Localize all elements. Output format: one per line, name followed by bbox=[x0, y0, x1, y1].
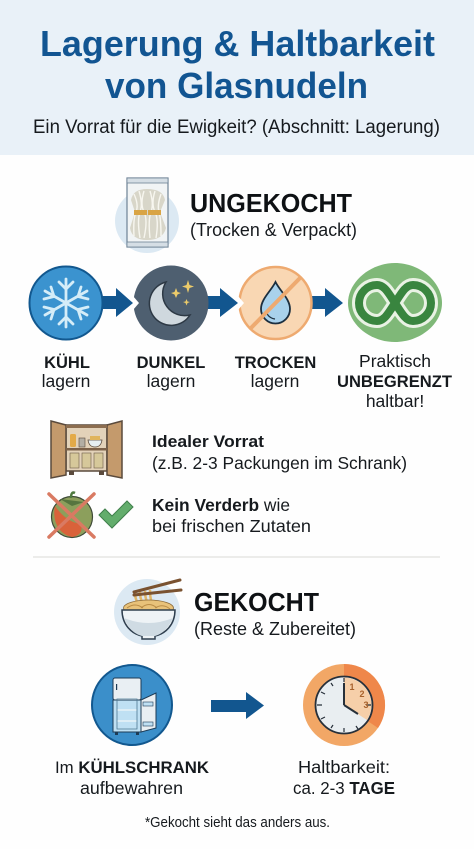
label: trocken lagern: TROCKEN bbox=[235, 354, 316, 372]
icon: noodle package bbox=[115, 178, 179, 253]
text: kein verderb: Kein Verderb wie bbox=[152, 495, 290, 515]
icon: check mark bbox=[99, 501, 133, 528]
label: praktisch unbegrenzt haltbar: haltbar! bbox=[366, 391, 424, 411]
label: dunkel lagern: lagern bbox=[147, 371, 195, 391]
icon: moon bbox=[133, 266, 208, 340]
arrow: trocken to haltbar bbox=[312, 288, 343, 317]
text: idealer vorrat bbox=[152, 432, 407, 473]
title bbox=[40, 23, 435, 106]
label: haltbarkeit 2-3 tage: Haltbarkeit: bbox=[298, 757, 390, 777]
icon: clock bbox=[303, 664, 385, 746]
arrow: fridge to shelf life bbox=[211, 692, 264, 719]
icon: clock: 1 bbox=[349, 682, 355, 692]
label: dunkel lagern: DUNKEL bbox=[137, 354, 205, 372]
label: trocken lagern: lagern bbox=[251, 371, 299, 391]
subheading: trocken und verpackt: (Trocken & Verpackt) bbox=[190, 219, 357, 240]
label: kuehl lagern: lagern bbox=[42, 371, 90, 391]
header panel bbox=[0, 0, 474, 155]
label: dunkel lagern bbox=[137, 354, 205, 391]
icon: open fridge bbox=[92, 665, 172, 745]
icon: water drop crossed out bbox=[238, 267, 312, 339]
label: im kuehlschrank aufbewahren: aufbewahren bbox=[80, 778, 183, 798]
arrow: dunkel to trocken bbox=[207, 288, 238, 317]
icon: infinity bbox=[348, 263, 442, 342]
label: praktisch unbegrenzt haltbar: UNBEGRENZT bbox=[337, 373, 452, 391]
label: haltbarkeit 2-3 tage bbox=[293, 757, 395, 798]
label: praktisch unbegrenzt haltbar bbox=[337, 351, 452, 411]
label: haltbarkeit 2-3 tage: ca. 2-3 TAGE bbox=[293, 778, 395, 798]
heading: gekocht: GEKOCHT bbox=[194, 587, 319, 617]
icon: spoiled tomato crossed out bbox=[49, 493, 94, 538]
label: im kuehlschrank aufbewahren bbox=[55, 758, 210, 798]
text: kein verderb bbox=[152, 495, 311, 536]
label: im kuehlschrank aufbewahren: Im KÜHLSCHRANK bbox=[55, 758, 210, 777]
label: kuehl lagern: KÜHL bbox=[44, 353, 90, 372]
icon: pantry cupboard bbox=[51, 421, 122, 478]
text: kein verderb: bei frischen Zutaten bbox=[152, 516, 311, 536]
title: Lagerung & Haltbarkeit bbox=[40, 23, 435, 64]
panel: gekocht bbox=[55, 579, 395, 798]
subtitle: Ein Vorrat für die Ewigkeit? (Abschnitt: Lagerung) bbox=[33, 117, 440, 138]
label: trocken lagern bbox=[235, 354, 316, 391]
icon: noodle bowl bbox=[114, 579, 181, 645]
text: idealer vorrat: Idealer Vorrat bbox=[152, 432, 264, 451]
label: praktisch unbegrenzt haltbar: Praktisch bbox=[359, 351, 431, 371]
icon: clock: 2 bbox=[359, 689, 365, 699]
label: kuehl lagern bbox=[42, 353, 90, 391]
arrow: kuehl to dunkel bbox=[102, 288, 133, 317]
text: idealer vorrat: (z.B. 2-3 Packungen im Schrank) bbox=[152, 453, 407, 473]
title: von Glasnudeln bbox=[105, 65, 368, 106]
subheading: reste und zubereitet: (Reste & Zubereitet) bbox=[194, 618, 356, 639]
icon: clock: 3 bbox=[363, 700, 369, 710]
heading: ungekocht: UNGEKOCHT bbox=[190, 188, 352, 218]
panel: ungekocht bbox=[30, 178, 452, 538]
icon: snowflake bbox=[30, 266, 102, 340]
footnote: *Gekocht sieht das anders aus. bbox=[145, 815, 330, 831]
